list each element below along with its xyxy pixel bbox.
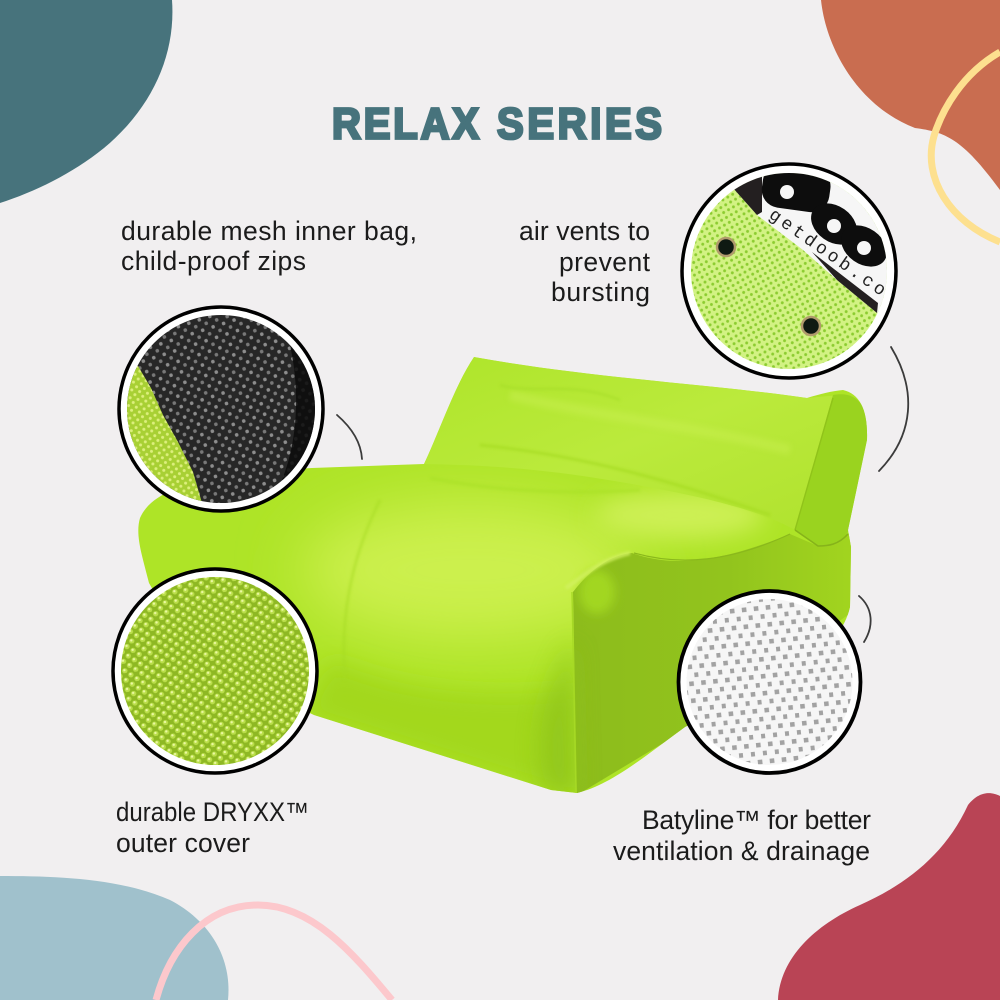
blob: top-right coral bbox=[821, 0, 1000, 190]
text: mesh inner bag: durable mesh inner bag, bbox=[121, 216, 417, 246]
bag back cushion bbox=[424, 357, 840, 530]
bag back cushion end bbox=[795, 394, 868, 546]
title: SERIES bbox=[497, 99, 662, 148]
detail circle: DRYXX outer cover bbox=[113, 569, 317, 773]
text: air vents: air vents to bbox=[519, 216, 650, 246]
bag lower shade bbox=[300, 660, 577, 800]
bag seat and front base bbox=[138, 357, 868, 793]
connector arc: batyline bbox=[859, 596, 871, 642]
detail circle: batyline bbox=[678, 591, 860, 773]
vent eyelets bbox=[717, 238, 820, 335]
text: Batyline: ventilation & drainage bbox=[613, 836, 870, 866]
ring: top-right yellow bbox=[931, 52, 1000, 242]
text: mesh inner bag: child-proof zips bbox=[121, 246, 306, 276]
bag front glow bbox=[300, 500, 640, 640]
detail circle: mesh inner bag bbox=[119, 307, 330, 520]
blob: top-left teal bbox=[0, 0, 172, 203]
bean bag lounger bbox=[138, 357, 868, 793]
bag right face bbox=[573, 530, 855, 795]
text: mesh inner bag bbox=[121, 216, 417, 276]
bag seat highlight bbox=[595, 491, 765, 539]
text: Batyline: Batyline™ for better bbox=[642, 805, 871, 835]
text: DRYXX outer cover: durable DRYXX™ bbox=[116, 797, 309, 827]
text: DRYXX outer cover: outer cover bbox=[116, 828, 250, 858]
bag corner puff bbox=[579, 570, 615, 614]
logo url: getdoob.co bbox=[765, 206, 889, 301]
blob: bottom-right red bbox=[778, 793, 1000, 1000]
title bbox=[332, 99, 662, 148]
logo mark bbox=[762, 173, 886, 267]
bag corner shade bbox=[538, 654, 575, 793]
bag wrinkles bbox=[344, 501, 380, 623]
detail circle: air vents bbox=[680, 162, 898, 380]
text: air vents bbox=[519, 216, 651, 307]
ring: bottom-left pink bbox=[156, 905, 392, 1000]
text: air vents: bursting bbox=[551, 277, 650, 307]
blob: bottom-left light blue bbox=[0, 876, 229, 1000]
text: Batyline bbox=[613, 805, 871, 866]
text: DRYXX outer cover bbox=[116, 797, 309, 858]
title: RELAX bbox=[332, 99, 479, 148]
text: air vents: prevent bbox=[559, 247, 651, 277]
connector arc: air vents bbox=[879, 347, 908, 471]
connector arc: mesh bbox=[337, 415, 362, 459]
